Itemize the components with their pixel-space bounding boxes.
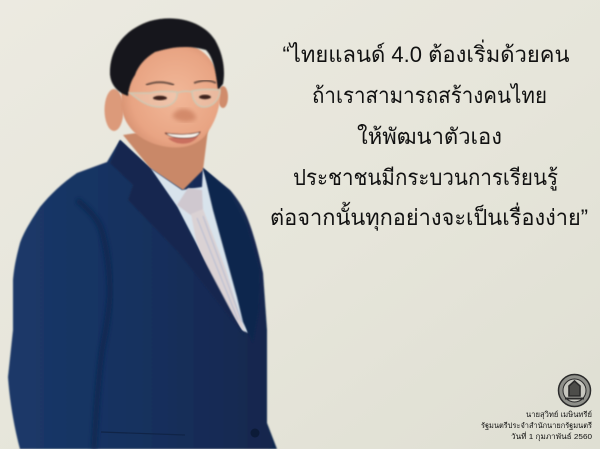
hair: [110, 18, 224, 96]
striped tie: [177, 188, 245, 332]
eyes: [153, 95, 211, 100]
eyebrows: [146, 81, 216, 85]
name: นายสุวิทย์ เมษินทรีย์: [526, 410, 592, 419]
left lapel: [110, 140, 245, 337]
arm seam shadow: [77, 200, 110, 449]
right lapel: [203, 168, 260, 343]
suit jacket: [8, 140, 277, 449]
pocket: [101, 432, 185, 435]
icon: government emblem seal: [558, 374, 590, 406]
smile: [165, 132, 200, 144]
neck: [123, 128, 208, 190]
position: รัฐมนตรีประจำสำนักนายกรัฐมนตรี: [481, 421, 592, 430]
face: [121, 44, 220, 148]
photo: man in navy suit: [8, 18, 277, 449]
left ear: [104, 89, 124, 131]
attribution text: [481, 410, 592, 441]
button: [250, 428, 260, 438]
quote line 4: ประชาชนมีกระบวนการเรียนรู้: [293, 165, 558, 191]
quote line 5: ต่อจากนั้นทุกอย่างจะเป็นเรื่องง่าย”: [270, 202, 588, 231]
glasses: [130, 89, 220, 107]
right ear: [218, 86, 228, 108]
quote text: [270, 39, 588, 231]
shirt: [150, 168, 248, 333]
date: วันที่ 1 กุมภาพันธ์ 2560: [511, 431, 592, 441]
quote line 3: ให้พัฒนาตัวเอง: [357, 124, 502, 149]
nose: [172, 109, 196, 122]
quote line 2: ถ้าเราสามารถสร้างคนไทย: [312, 83, 547, 108]
quote line 1: “ไทยแลนด์ 4.0 ต้องเริ่มด้วยคน: [282, 39, 570, 67]
